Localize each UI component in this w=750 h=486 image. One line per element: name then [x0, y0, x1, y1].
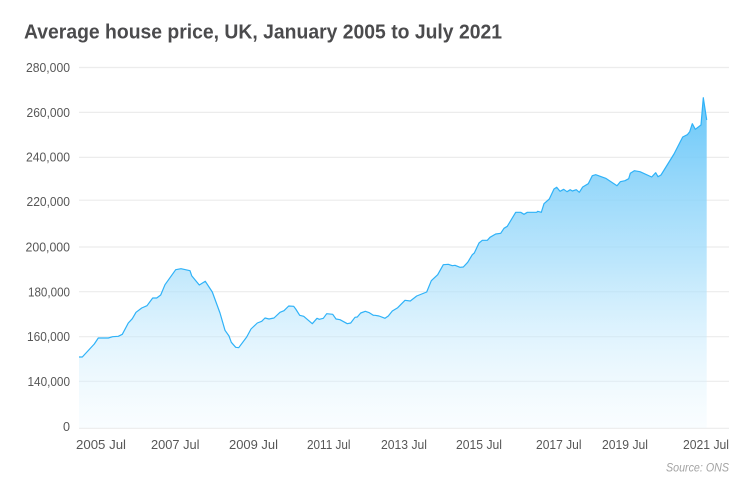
y axis labels: 160,000	[27, 329, 70, 344]
x axis labels: 2019 Jul	[602, 437, 648, 452]
x axis labels: 2015 Jul	[456, 437, 502, 452]
y axis labels: 220,000	[26, 194, 70, 209]
y axis labels: 280,000	[26, 60, 70, 75]
y axis labels: 180,000	[28, 284, 70, 299]
title: Average house price, UK, January 2005 to July 2021	[24, 21, 502, 43]
x axis labels: 2009 Jul	[229, 437, 278, 452]
x axis labels: 2013 Jul	[381, 437, 427, 452]
y axis labels: 0	[63, 419, 70, 434]
x axis labels: 2007 Jul	[151, 437, 200, 452]
y axis labels: 260,000	[26, 105, 70, 120]
price line	[79, 98, 707, 357]
area fill	[79, 98, 707, 428]
y axis labels	[26, 60, 70, 434]
x axis labels	[76, 437, 729, 452]
source note: Source: ONS	[666, 460, 729, 474]
x axis labels: 2021 Jul	[683, 437, 729, 452]
y axis labels: 140,000	[28, 374, 70, 389]
x axis labels: 2005 Jul	[76, 437, 126, 452]
x axis labels: 2017 Jul	[536, 437, 582, 452]
x axis labels: 2011 Jul	[307, 437, 351, 452]
chart: house price area chart	[26, 60, 729, 452]
y axis labels: 240,000	[26, 150, 70, 165]
y axis labels: 200,000	[26, 239, 70, 254]
